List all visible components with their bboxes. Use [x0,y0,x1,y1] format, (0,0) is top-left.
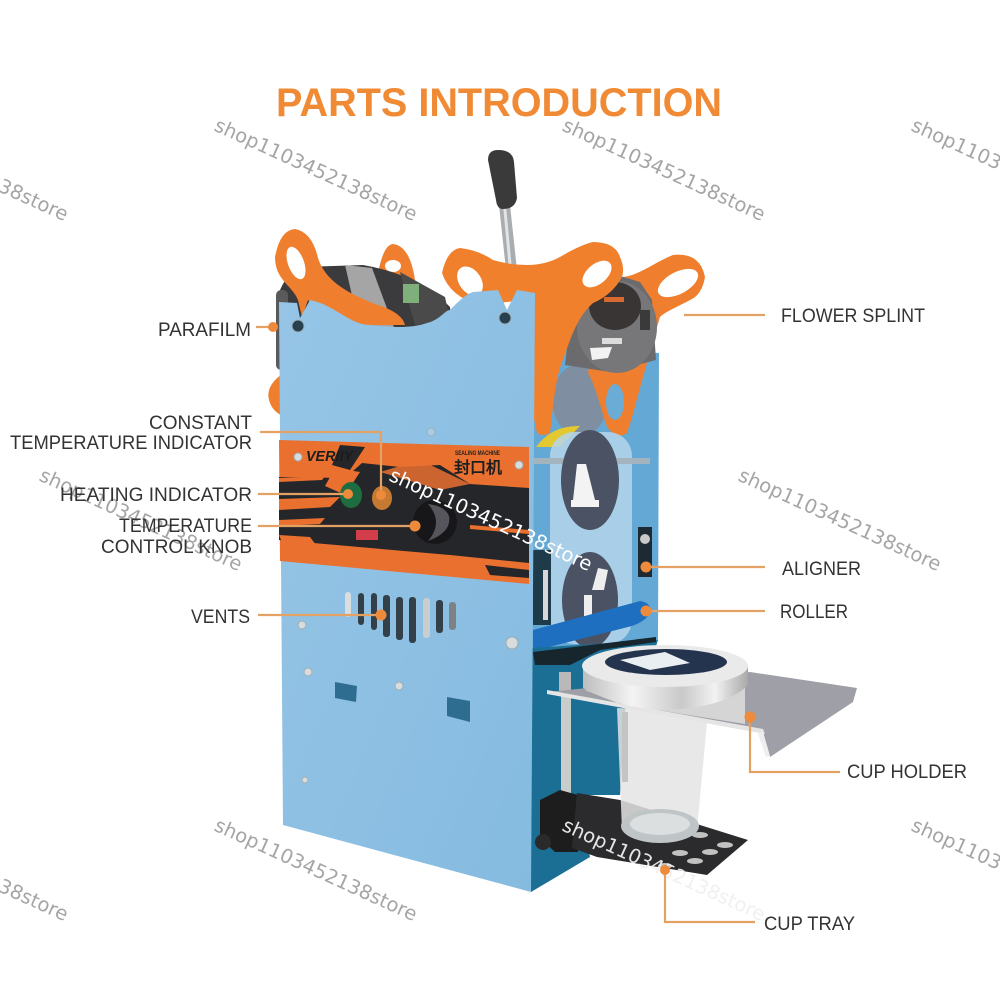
brand: VERIIY [306,448,355,465]
watermarks: shop1103452138store [211,114,421,226]
screws [292,312,523,783]
watermarks: shop1103452138store [211,814,421,926]
left flower splint [268,229,405,417]
roller [533,601,650,651]
watermarks: shop1103452138store [386,464,596,576]
front flower splint [442,242,623,435]
label: heating indicator [60,484,353,506]
label: constant temperature indicator [10,412,386,500]
right film roll [565,276,657,373]
machine name chinese: 封口机 [454,458,502,477]
watermarks: shop1103452138store [735,464,945,576]
cup [617,708,708,843]
power switch [356,530,378,540]
label: cup tray: CUP TRAY [764,913,855,935]
label: cup holder [744,712,967,783]
cup holder plate [547,672,857,757]
temperature light [372,486,392,510]
left film roll [276,265,452,370]
cup film sheet [532,426,652,648]
cup sealing ring [582,645,748,710]
label: temperature control knob: CONTROL KNOB [101,536,252,558]
label: heating indicator: HEATING INDICATOR [60,484,252,506]
lever [488,150,517,270]
machine name: SEALING MACHINE [455,451,500,457]
label: flower splint: FLOWER SPLINT [781,305,925,327]
far left splint [373,244,415,325]
panel slots [335,682,470,722]
inner grey film shadow [552,364,608,436]
side panel [531,345,659,660]
watermarks: shop1103452138store [36,464,246,576]
control panel [279,440,529,584]
label: aligner [640,558,861,580]
watermarks: shop1103452138store [559,814,769,926]
temperature knob [413,500,457,544]
label: vents: VENTS [191,606,250,628]
watermarks: shop1103452138store [559,114,769,226]
lower inner housing [531,637,658,892]
heating light [340,482,362,508]
vents [345,592,456,643]
label: vents [191,606,386,628]
label: temperature control knob: TEMPERATURE [119,515,252,537]
label: cup tray [660,865,855,935]
label: constant temperature indicator: CONSTANT [149,412,252,434]
cup tray [572,793,748,875]
front panel [279,290,535,892]
far flower splint [588,255,705,435]
label: temperature control knob [101,515,420,558]
machine [268,150,857,892]
label: parafilm: PARAFILM [158,319,251,341]
label: aligner: ALIGNER [782,558,861,580]
label: roller [640,601,848,623]
label: roller: ROLLER [780,601,848,623]
label: constant temperature indicator: TEMPERATURE INDICATOR [10,432,252,454]
title: PARTS INTRODUCTION [276,81,722,125]
label: cup holder: CUP HOLDER [847,761,967,783]
